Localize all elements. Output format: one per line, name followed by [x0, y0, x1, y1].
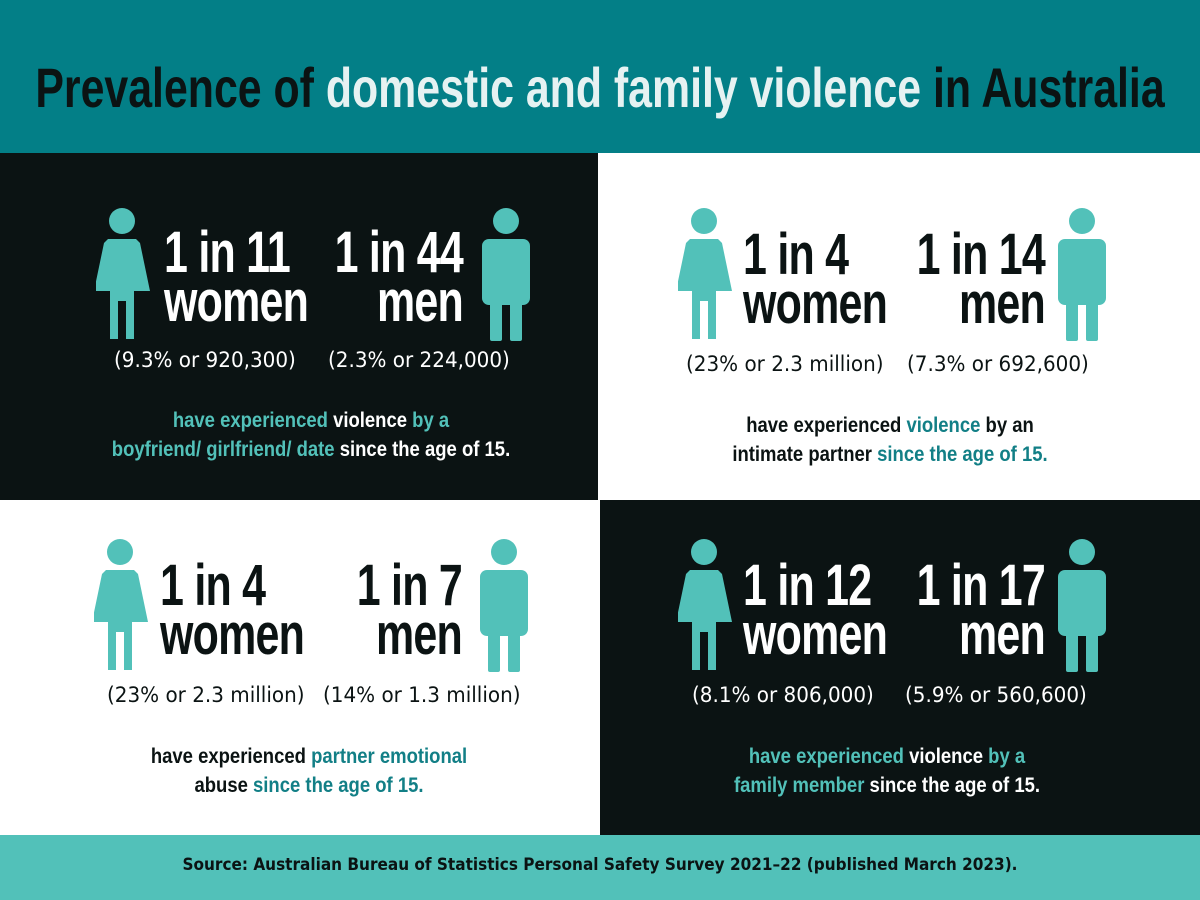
- caption: [732, 414, 1048, 466]
- caption: have experienced violence by a: [749, 745, 1025, 768]
- caption: have experienced partner emotional: [151, 745, 467, 768]
- percentages: (23% or 2.3 million): [686, 352, 884, 376]
- stat: women: women: [743, 271, 887, 336]
- stat: men: men: [959, 271, 1045, 336]
- icon: woman: [678, 539, 732, 670]
- caption: [734, 745, 1040, 797]
- stat: men: [917, 553, 1045, 667]
- panel: emotional abuse: [0, 500, 600, 835]
- caption: family member since the age of 15.: [734, 774, 1040, 797]
- percentages: (9.3% or 920,300): [114, 348, 296, 372]
- stat: men: men: [959, 602, 1045, 667]
- icon: woman: [96, 208, 150, 339]
- stat: men: men: [377, 269, 463, 334]
- icon: man: [482, 208, 530, 341]
- stat: women: 1 in 11: [164, 220, 290, 285]
- icon: man: [1058, 539, 1106, 672]
- stat: men: 1 in 17: [917, 553, 1045, 618]
- stat: women: 1 in 4: [743, 222, 848, 287]
- stat: men: [357, 553, 462, 667]
- caption: have experienced violence by an: [746, 414, 1034, 437]
- stat: men: [917, 222, 1046, 336]
- stat: women: 1 in 12: [743, 553, 871, 618]
- stat: women: women: [743, 602, 887, 667]
- caption: [151, 745, 467, 797]
- panel: boyfriend/girlfriend/date: [0, 153, 598, 500]
- panel: intimate partner: (7.3% or 692,600): [907, 352, 1089, 376]
- panel: boyfriend/girlfriend/date: (2.3% or 224,000): [328, 348, 510, 372]
- caption: boyfriend/ girlfriend/ date since the age of 15.: [112, 438, 510, 461]
- footer: source: [0, 835, 1200, 900]
- caption: [112, 409, 510, 461]
- stat: women: [160, 553, 304, 667]
- caption: have experienced violence by a: [173, 409, 449, 432]
- header: [0, 0, 1200, 153]
- footer: source: Source: Australian Bureau of Statistics Personal Safety Survey 2021–22 (published March 2023).: [182, 855, 1018, 875]
- panel: emotional abuse: (14% or 1.3 million): [323, 683, 521, 707]
- stat: men: [335, 220, 464, 334]
- panel: family member: [600, 500, 1200, 835]
- stat: women: [742, 222, 887, 336]
- stat: men: 1 in 44: [335, 220, 463, 285]
- stat: women: women: [160, 602, 304, 667]
- panel: family member: (5.9% or 560,600): [905, 683, 1087, 707]
- stat: men: 1 in 14: [917, 222, 1045, 287]
- stat: men: 1 in 7: [357, 553, 462, 618]
- icon: woman: [678, 208, 732, 339]
- icon: woman: [94, 539, 148, 670]
- stat: women: [164, 220, 308, 334]
- caption: abuse since the age of 15.: [194, 774, 424, 797]
- stat: women: women: [164, 269, 308, 334]
- stat: women: 1 in 4: [160, 553, 265, 618]
- panel: intimate partner: [598, 153, 1200, 500]
- icon: man: [1058, 208, 1106, 341]
- icon: man: [480, 539, 528, 672]
- percentages: (8.1% or 806,000): [692, 683, 874, 707]
- stat: women: [742, 553, 887, 667]
- percentages: (23% or 2.3 million): [107, 683, 305, 707]
- stat: men: men: [376, 602, 462, 667]
- caption: intimate partner since the age of 15.: [732, 443, 1048, 466]
- title: Prevalence of domestic and family violence in Australia: [35, 56, 1165, 119]
